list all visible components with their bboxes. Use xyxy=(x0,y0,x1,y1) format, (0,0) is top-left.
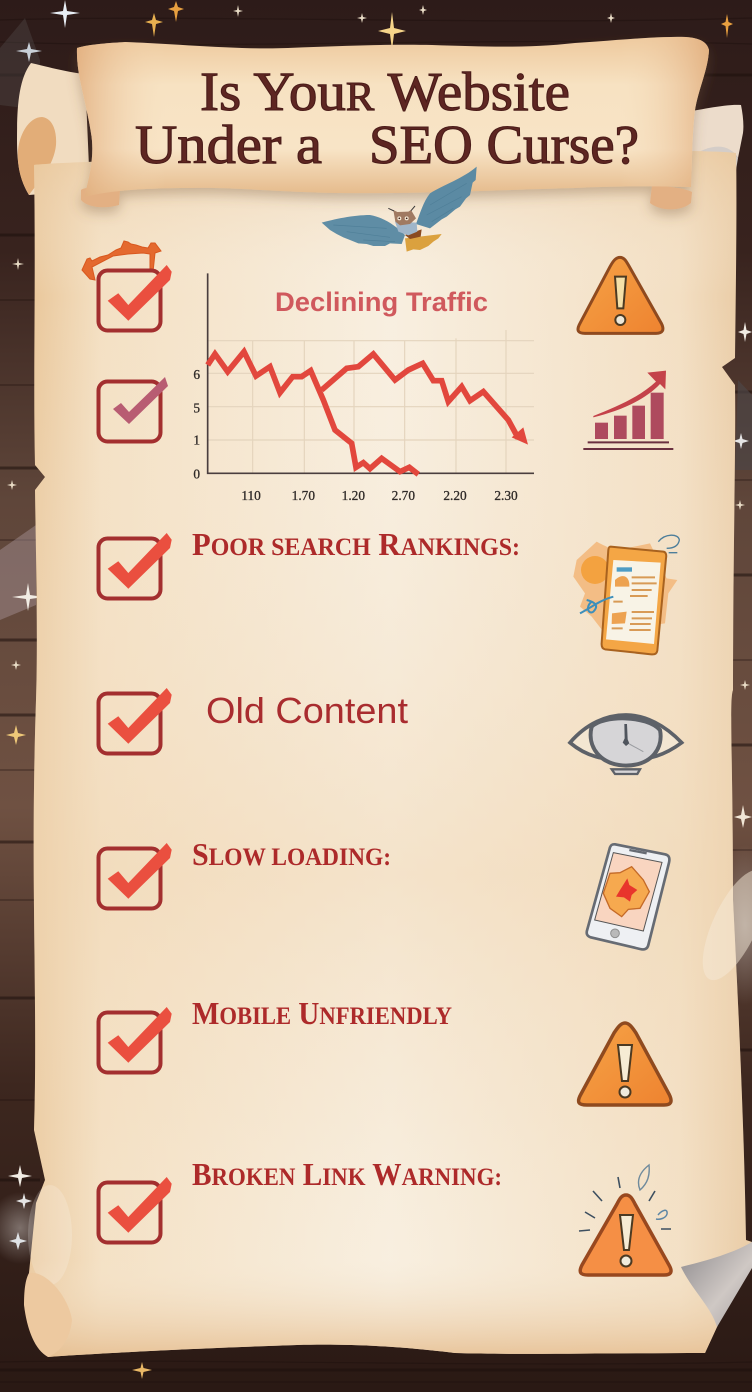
title text xyxy=(135,61,639,175)
x axis labels: 2.30 xyxy=(494,488,518,503)
title text: SEO Curse? xyxy=(369,114,639,175)
heading: Mobile Unfriendly: MOBILE UNFRIENDLY xyxy=(192,995,452,1031)
x axis labels: 2.70 xyxy=(392,488,415,503)
item 1: sign and checkbox xyxy=(82,241,172,330)
x axis labels: 1.20 xyxy=(342,488,365,503)
parchment scroll: bottom right curl xyxy=(681,1242,752,1327)
heading: Slow loading: SLOW LOADING: xyxy=(192,836,391,872)
icon: orange signpost xyxy=(82,241,161,280)
title banner xyxy=(77,37,709,209)
x axis labels xyxy=(241,488,518,503)
parchment scroll: right back roll xyxy=(680,105,743,170)
y axis labels: 5 xyxy=(193,400,200,415)
item 7: checkbox xyxy=(98,1177,172,1242)
x axis labels: 1.70 xyxy=(292,488,315,503)
y axis labels xyxy=(193,367,200,481)
parchment scroll: bottom left roll xyxy=(24,1273,72,1357)
icon: warning triangle 2 xyxy=(579,1023,671,1105)
icon: broken phone xyxy=(587,844,669,949)
icon: clock eye xyxy=(570,715,682,774)
item 2: checkbox xyxy=(98,377,168,442)
icon: phone with search results xyxy=(573,535,679,654)
title text: Under a xyxy=(135,114,322,175)
x axis labels: 110 xyxy=(241,488,261,503)
heading: Poor search rankings: POOR SEARCH RANKINGS: xyxy=(192,526,520,562)
title text: Is YouR Website xyxy=(200,61,570,122)
y axis labels: 6 xyxy=(193,367,200,382)
heading: Declining Traffic: Declining Traffic xyxy=(275,287,488,317)
icon: growth bar chart xyxy=(583,371,673,449)
x axis labels: 2.20 xyxy=(443,488,467,503)
parchment scroll: left roll xyxy=(17,63,90,195)
line chart: declining traffic xyxy=(193,273,534,503)
item 6: checkbox xyxy=(98,1007,172,1072)
icon: warning triangle with alert marks xyxy=(579,1165,671,1275)
heading: Broken Link Warning: BROKEN LINK WARNING: xyxy=(192,1156,502,1192)
checkbox 1 xyxy=(98,265,172,330)
item 5: checkbox xyxy=(98,843,172,908)
y axis labels: 0 xyxy=(193,466,200,481)
item 4: checkbox xyxy=(98,688,172,754)
item 3: checkbox xyxy=(98,533,172,598)
icon: warning triangle 1 xyxy=(578,257,663,333)
y axis labels: 1 xyxy=(193,433,200,448)
icon: flying owl xyxy=(322,167,477,252)
heading: Old Content: Old Content xyxy=(206,690,408,731)
